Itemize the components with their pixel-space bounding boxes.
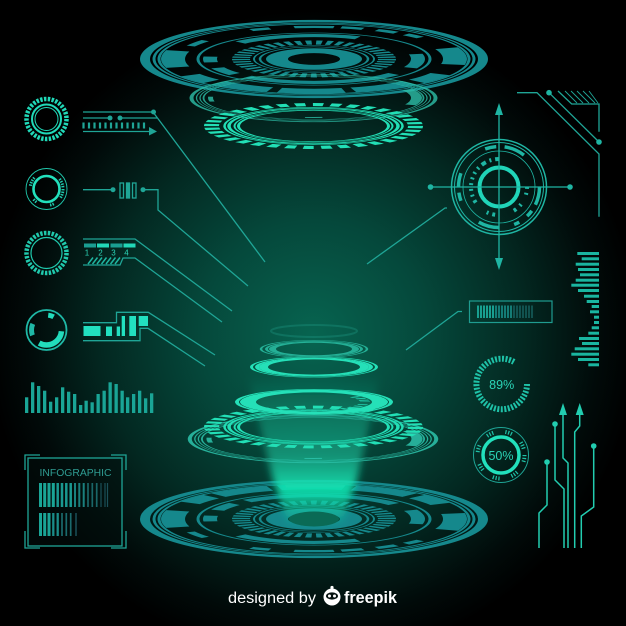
hologram centre glow bbox=[289, 512, 339, 526]
connector 1 bbox=[83, 110, 265, 262]
footer credit bbox=[228, 586, 398, 607]
faint stacked ring bbox=[271, 325, 357, 337]
connector 3 with numbered keys: 2 bbox=[98, 248, 103, 258]
connector 3 with numbered keys: 3 bbox=[111, 248, 116, 258]
crosshair radar bbox=[428, 103, 573, 270]
lower gear ring bbox=[212, 407, 416, 447]
horizontal bar chart right bbox=[571, 252, 599, 366]
gauge icon 3 bbox=[26, 233, 66, 273]
gauge icon 2 bbox=[26, 168, 67, 210]
89 percent gauge: 89% bbox=[489, 378, 514, 392]
connector to radar bbox=[367, 208, 447, 264]
light beam bbox=[248, 375, 380, 522]
infographic panel: INFOGRAPHIC bbox=[40, 467, 112, 479]
50 percent gauge: 50% bbox=[488, 449, 514, 463]
gauge icon 1 bbox=[26, 99, 66, 139]
infographic panel bbox=[25, 455, 126, 548]
stacked ring large bbox=[237, 389, 391, 415]
progress box bbox=[406, 301, 552, 350]
connector 2 bbox=[83, 183, 248, 286]
89 percent gauge bbox=[476, 359, 527, 409]
top gear ring bbox=[212, 105, 416, 147]
50 percent gauge bbox=[474, 428, 528, 482]
footer credit: designed by bbox=[228, 590, 316, 607]
gauge icon 4 bbox=[26, 310, 66, 350]
footer credit: freepik bbox=[344, 589, 398, 607]
connector 4 with bars bbox=[83, 312, 215, 366]
connector 3 with numbered keys bbox=[83, 239, 232, 322]
top floating ring bbox=[192, 74, 436, 122]
lower floating ring bbox=[190, 415, 436, 463]
stacked ring small bbox=[261, 340, 367, 358]
stacked ring medium bbox=[252, 357, 376, 377]
bar chart bbox=[25, 382, 153, 413]
top hologram disc bbox=[145, 21, 483, 97]
circuit arrows bbox=[539, 403, 596, 548]
circuit lines top right bbox=[517, 90, 602, 217]
connector 3 with numbered keys: 4 bbox=[124, 248, 129, 258]
bottom hologram disc bbox=[145, 481, 483, 557]
connector 3 with numbered keys: 1 bbox=[85, 248, 90, 258]
